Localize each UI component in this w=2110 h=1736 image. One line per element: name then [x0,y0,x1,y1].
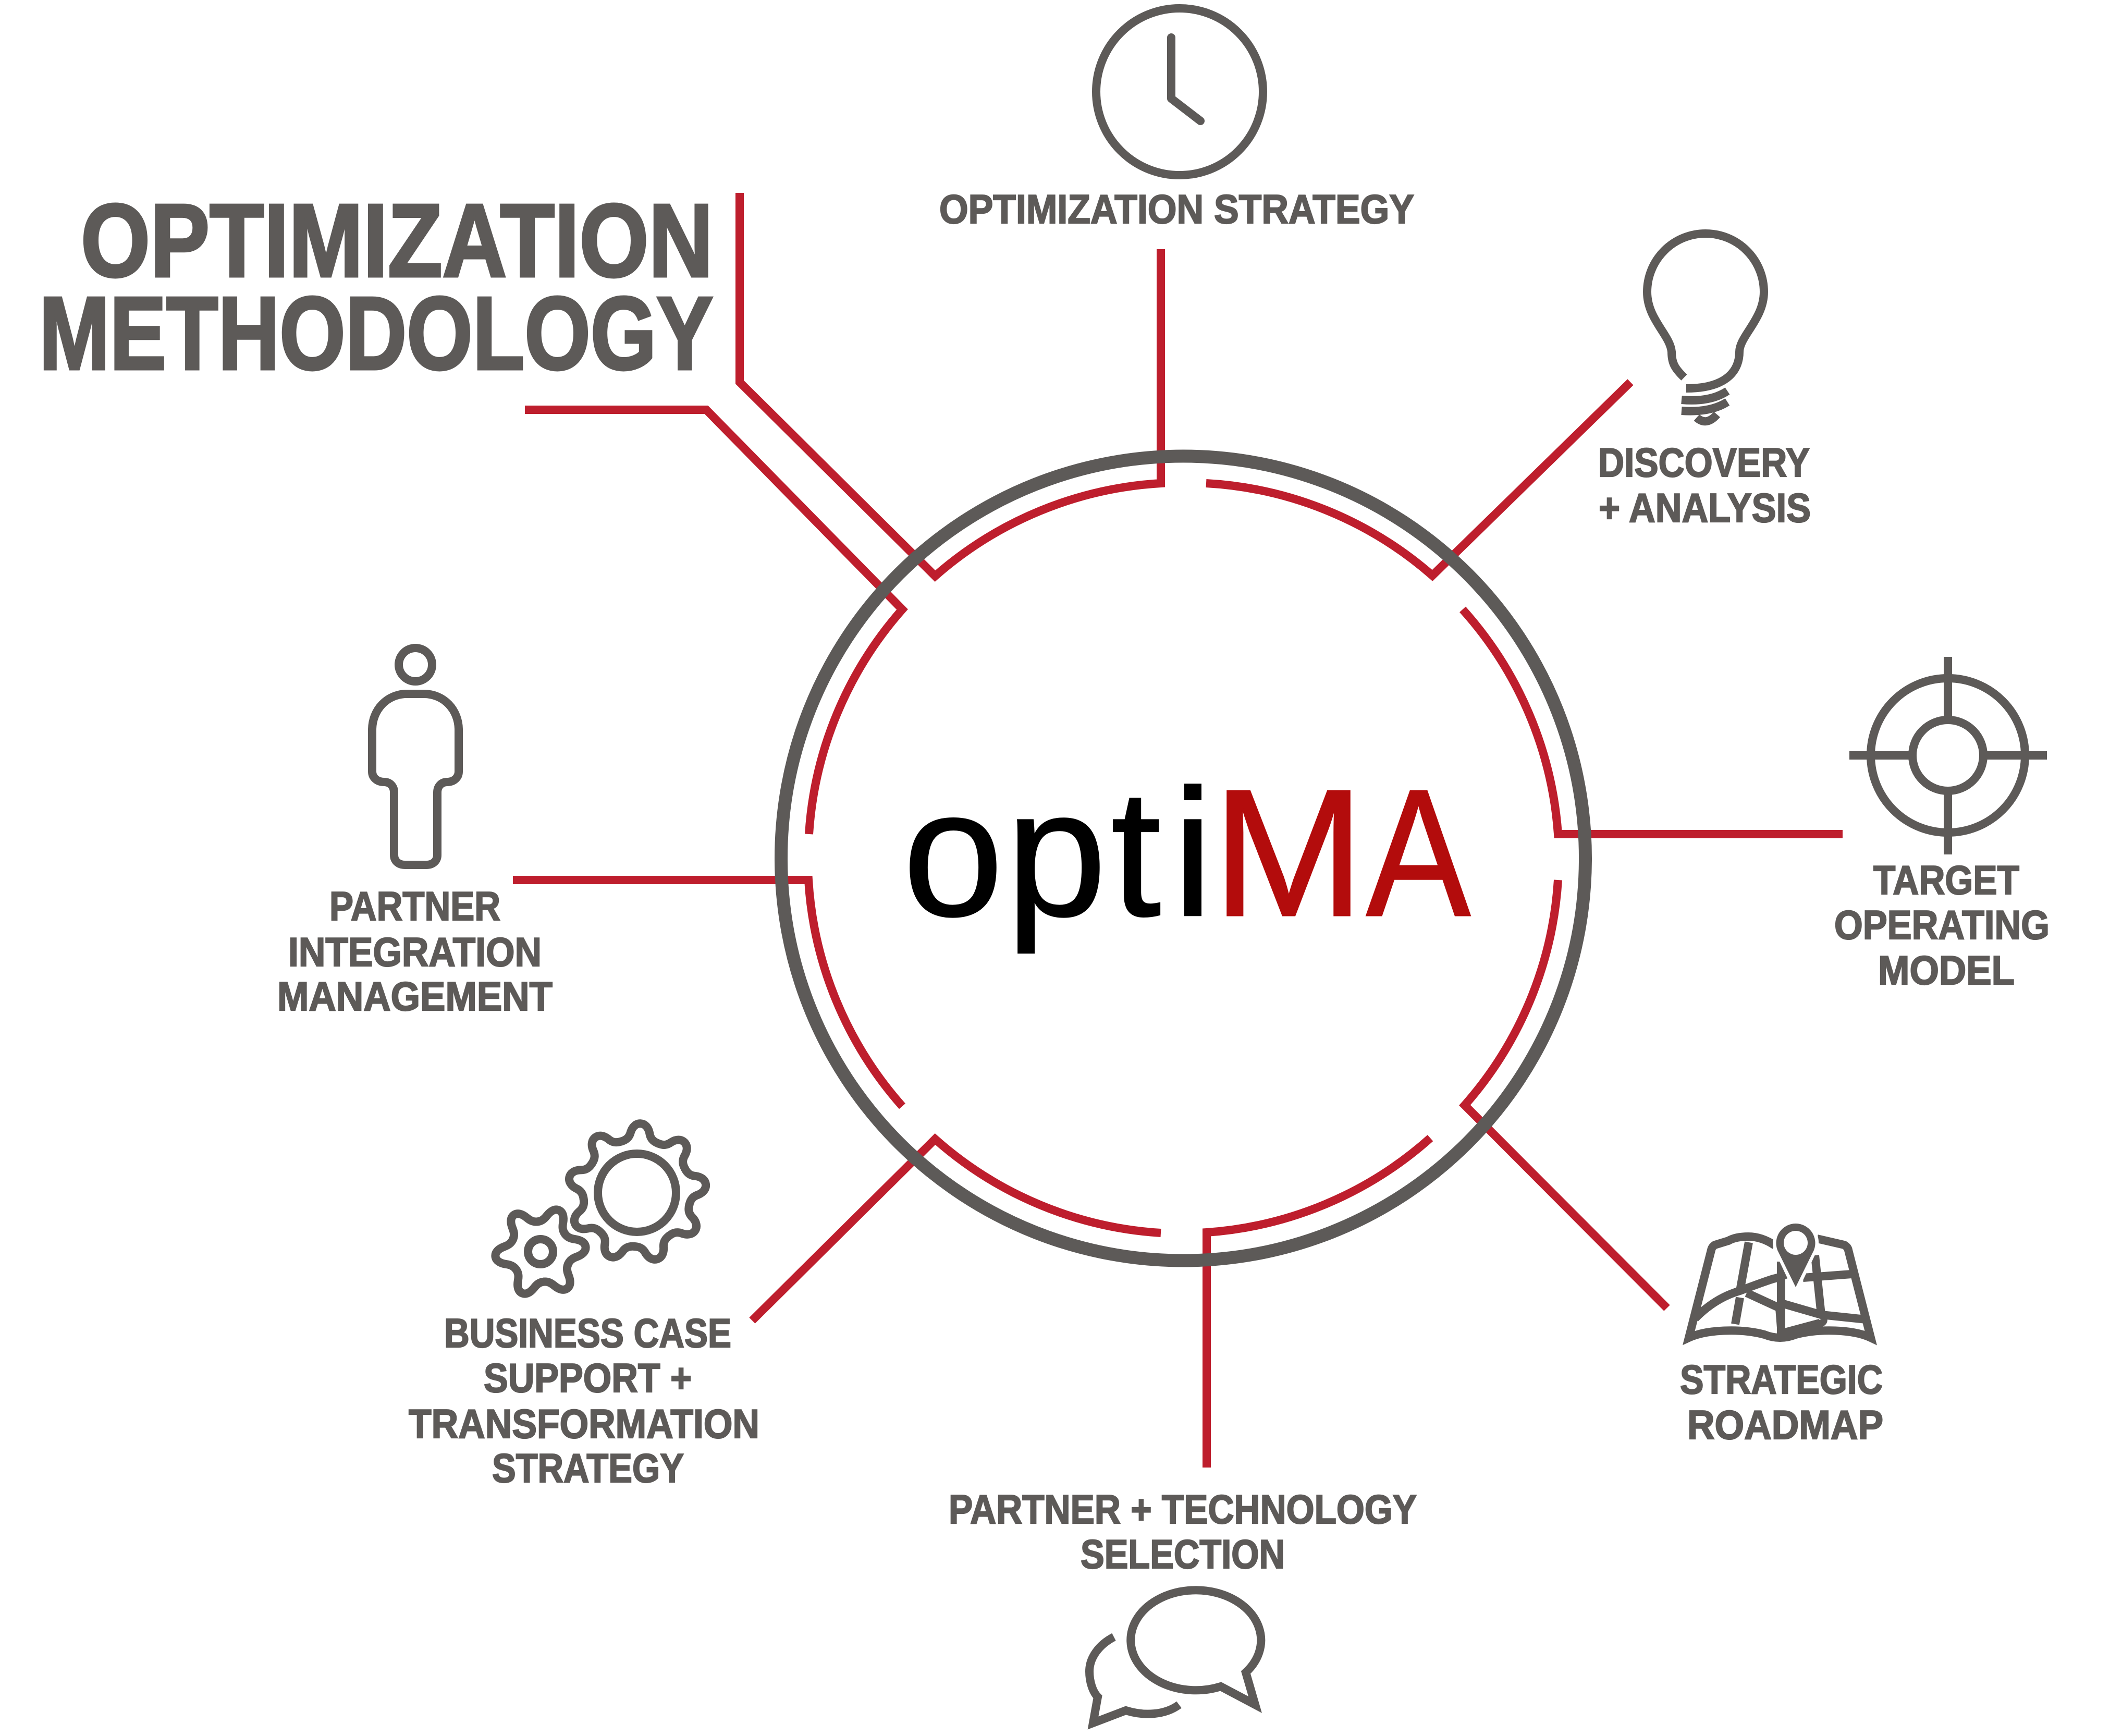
label: partner integration management: INTEGRATION [288,929,542,975]
label: partner integration management: PARTNER [329,883,500,929]
title: METHODOLOGY [39,276,713,392]
label: business case support + transformation strategy: BUSINESS CASE [444,1310,731,1356]
label: strategic roadmap: ROADMAP [1687,1402,1883,1448]
center logo: optiMA: M [1212,752,1365,954]
label: business case support + transformation strategy: SUPPORT + [484,1355,692,1401]
icon: person [372,648,459,865]
center logo: optiMA: A [1366,752,1471,954]
label: partner integration management [277,883,553,1019]
title: OPTIMIZATION [81,183,713,299]
icon: light bulb [1647,234,1764,421]
label: discovery + analysis: + ANALYSIS [1599,485,1811,531]
title [39,183,713,392]
icon: speech bubbles [1089,1590,1261,1723]
label: strategic roadmap: STRATEGIC [1680,1356,1883,1402]
icon: map with pin [1689,1223,1871,1338]
label: partner + technology selection: SELECTION [1081,1531,1285,1577]
icon: clock [1096,8,1263,175]
label: business case support + transformation strategy: TRANSFORMATION [409,1401,759,1447]
label: target operating model: TARGET [1873,857,2019,903]
label: partner integration management: MANAGEMENT [277,973,553,1019]
label: partner + technology selection: PARTNER + TECHNOLOGY [949,1486,1417,1532]
label: partner + technology selection [949,1486,1417,1577]
label: business case support + transformation strategy: STRATEGY [492,1445,684,1491]
center logo: optiMA: opti [903,752,1213,955]
label: target operating model: OPERATING [1834,902,2050,948]
label: optimization strategy: OPTIMIZATION STRATEGY [939,186,1414,232]
label: target operating model: MODEL [1878,947,2015,993]
label: discovery + analysis [1598,439,1811,531]
icon: target [1849,657,2047,854]
label: business case support + transformation strategy [409,1310,759,1491]
label: target operating model [1834,857,2050,993]
icon: gears [494,1122,708,1299]
label: strategic roadmap [1680,1356,1883,1448]
gray outer ring [781,456,1586,1261]
red connector arcs and lines [513,193,1843,1468]
label: discovery + analysis: DISCOVERY [1598,439,1810,485]
center logo: optiMA [903,752,1471,955]
